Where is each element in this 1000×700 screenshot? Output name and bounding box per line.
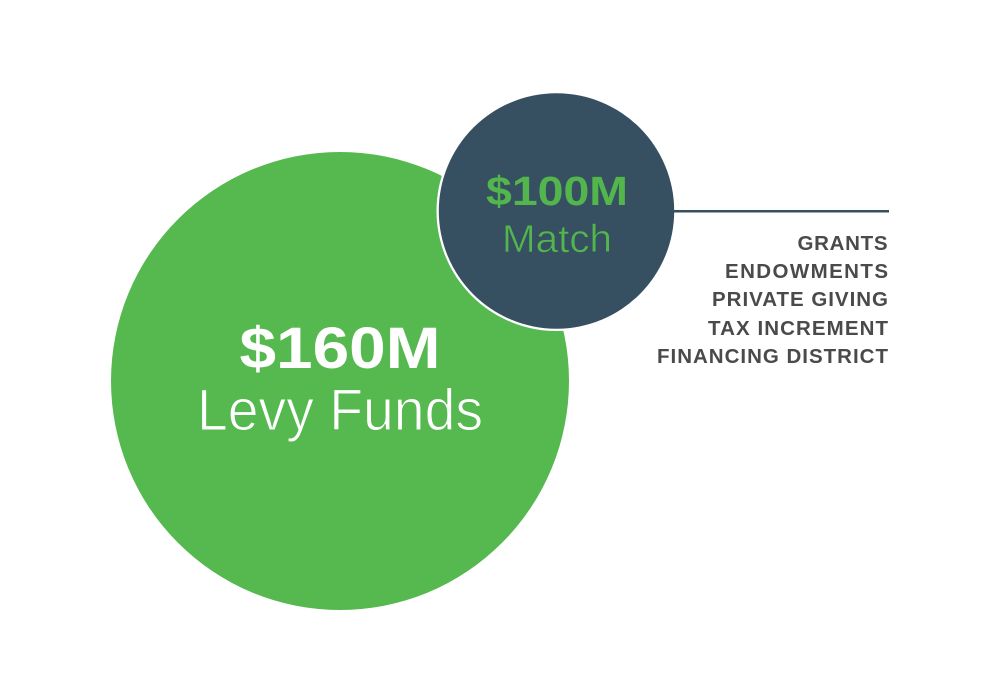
levy amount: $160M: [240, 316, 440, 381]
panel: levy funds circle: [111, 152, 569, 610]
match sources list: TAX INCREMENT: [708, 317, 888, 340]
match label: Match: [502, 218, 612, 261]
panel: match circle: [436, 91, 676, 331]
match sources list: PRIVATE GIVING: [712, 288, 888, 311]
match sources list: FINANCING DISTRICT: [657, 345, 888, 368]
levy label: Levy Funds: [197, 378, 483, 443]
match sources list: [657, 232, 888, 368]
match amount: $100M: [486, 168, 628, 214]
match sources list: GRANTS: [798, 232, 888, 255]
match sources list: ENDOWMENTS: [725, 260, 888, 283]
connector line: [674, 210, 889, 212]
